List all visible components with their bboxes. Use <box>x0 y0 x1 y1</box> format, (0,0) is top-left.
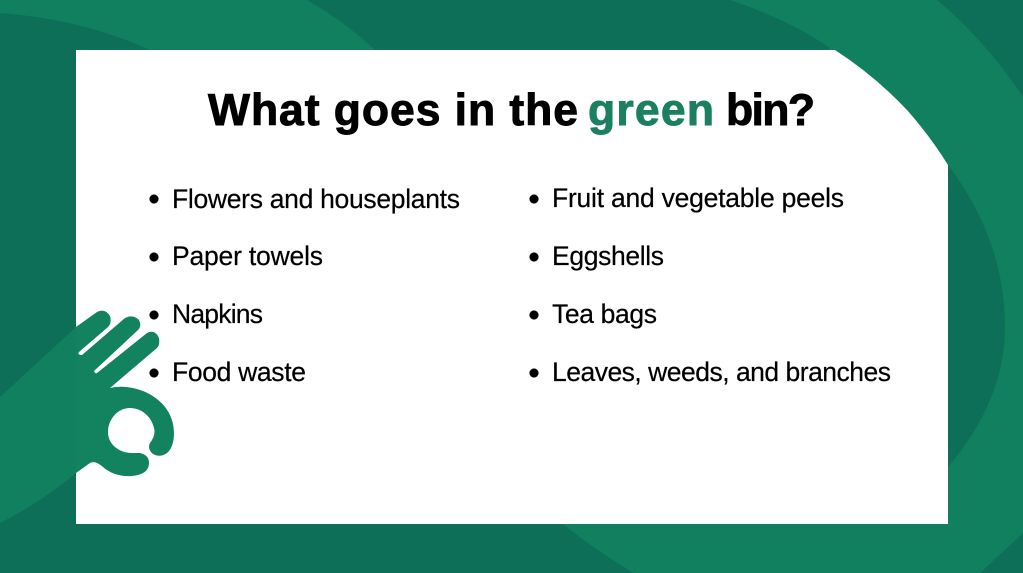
list: left column: Paper towels <box>172 241 323 271</box>
list: left column: Flowers and houseplants <box>172 184 460 214</box>
list: left column: Food waste <box>172 357 306 387</box>
title: bin? <box>726 86 815 135</box>
list: right column: Tea bags <box>552 299 657 329</box>
list: left column <box>150 184 460 387</box>
list: left column: Napkins <box>172 299 263 329</box>
title: What goes in the <box>208 86 578 135</box>
list: right column <box>530 183 891 387</box>
list: right column: Fruit and vegetable peels <box>552 183 844 213</box>
list: right column: Eggshells <box>552 241 664 271</box>
title: green <box>588 86 714 135</box>
panel: white card <box>76 50 948 524</box>
icon: ok hand <box>76 311 174 476</box>
list: right column: Leaves, weeds, and branches <box>552 357 891 387</box>
title <box>208 86 815 135</box>
